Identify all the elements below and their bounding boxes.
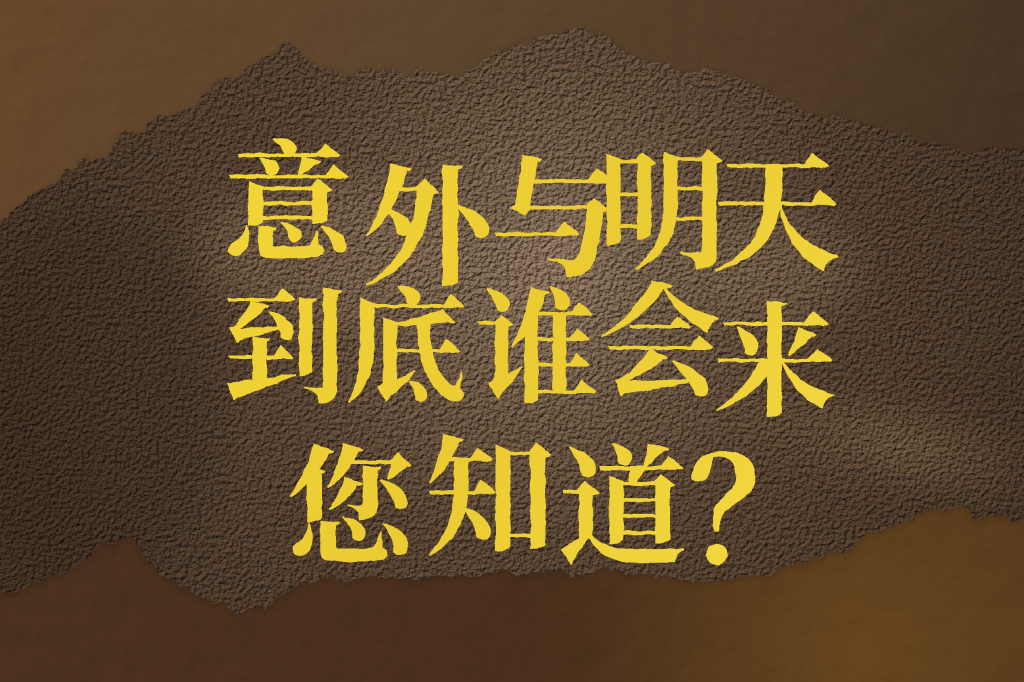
line 1: 天	[711, 145, 841, 289]
line 2: 谁	[475, 282, 599, 419]
line 1: 外	[362, 159, 503, 303]
line 1: 明	[597, 143, 727, 287]
line 3: ？	[688, 435, 833, 595]
line 3: 知	[425, 429, 555, 573]
title: three lines of gold calligraphy	[222, 135, 841, 595]
light patch right	[680, 220, 860, 320]
line 1: 意	[223, 135, 359, 279]
line 3: 您	[285, 439, 422, 583]
line 1: 与	[490, 150, 620, 294]
light patch left of centre	[200, 180, 460, 320]
line 2	[222, 276, 837, 433]
dark corner shading	[0, 210, 220, 590]
line 2: 到	[222, 282, 346, 419]
line 3: 道	[558, 439, 688, 583]
shadow under the torn edge	[8, 76, 1022, 614]
line 2: 底	[344, 282, 468, 419]
line 2: 会	[598, 276, 722, 413]
warm glow on lower right	[0, 500, 1024, 682]
line 2: 来	[713, 296, 837, 433]
diagonal light streak	[786, 403, 1014, 492]
line 1	[223, 135, 841, 303]
line 3	[285, 429, 833, 595]
lower smooth plaster band	[0, 500, 1024, 682]
